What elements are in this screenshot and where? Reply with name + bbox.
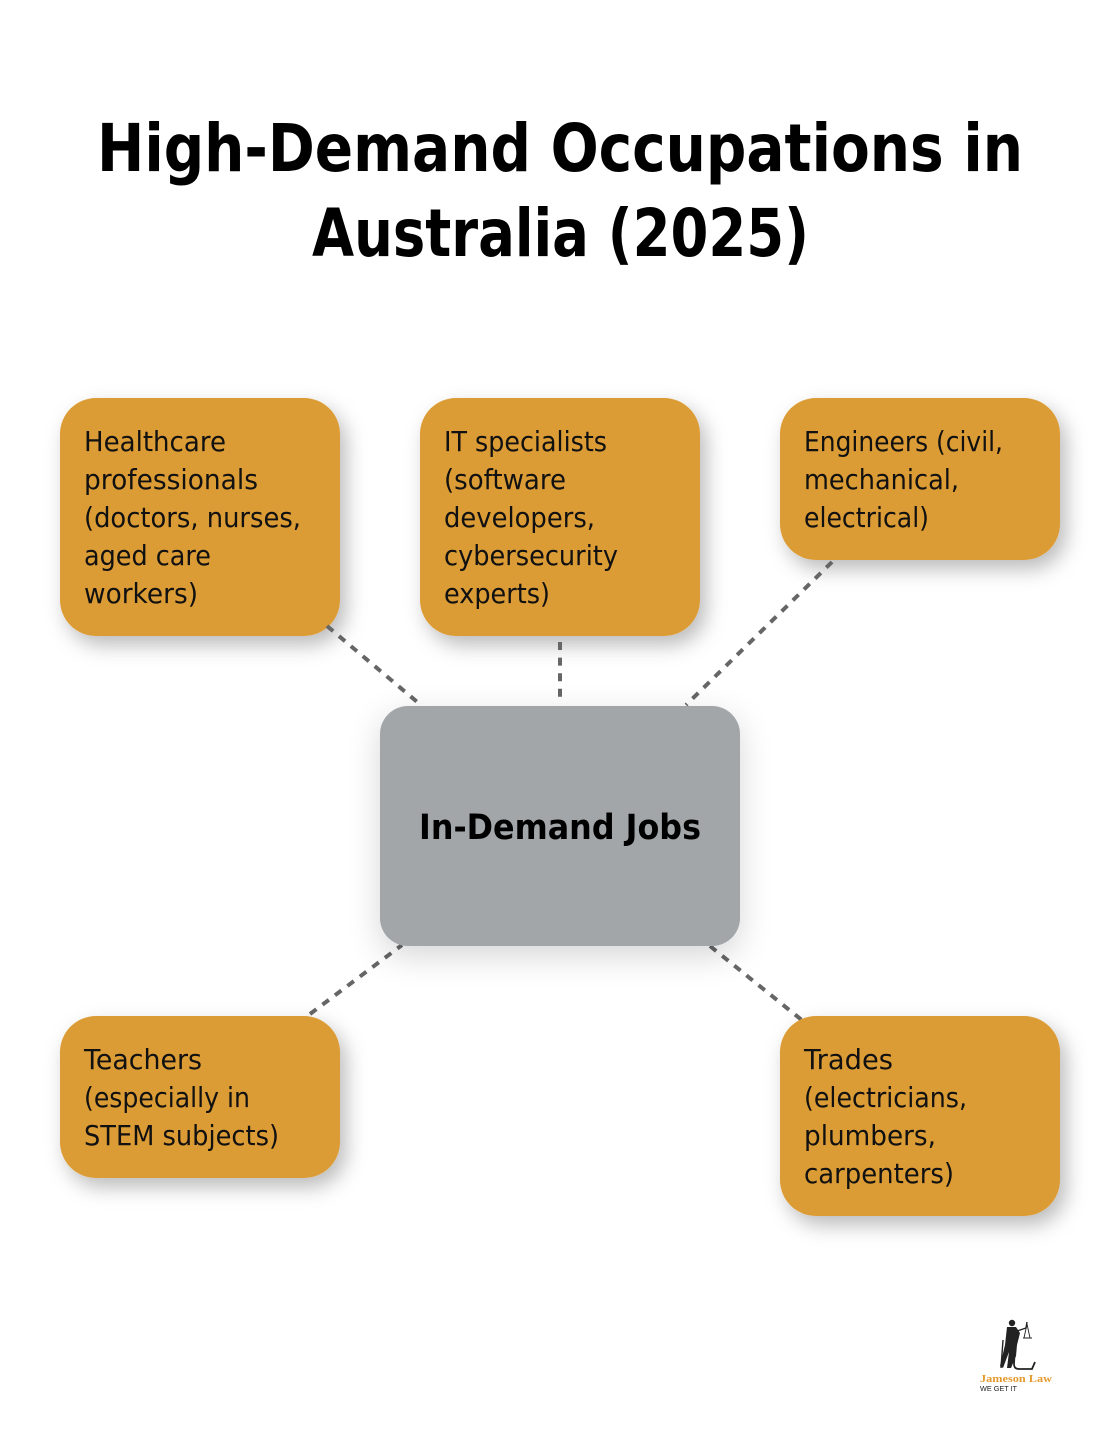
- card: IT specialists: (software: [444, 464, 566, 496]
- card: engineers: electrical): [804, 502, 929, 534]
- card: healthcare professionals: Healthcare: [84, 426, 226, 458]
- card: trades: Trades: [803, 1044, 893, 1076]
- card: teachers: [60, 1016, 340, 1178]
- connector: engineers to centre: [686, 562, 832, 705]
- connector: IT to centre: [558, 642, 562, 698]
- title: Australia (2025): [312, 196, 809, 272]
- title: [97, 111, 1023, 272]
- card: teachers: STEM subjects): [84, 1120, 279, 1152]
- icon: lady justice: [1000, 1320, 1035, 1369]
- logo wordmark: Jameson Law: [980, 1374, 1052, 1385]
- card: healthcare professionals: workers): [84, 578, 198, 610]
- logo tagline: WE GET IT: [980, 1386, 1018, 1393]
- card: IT specialists: [420, 398, 700, 636]
- centre box: in-demand jobs: [380, 706, 740, 946]
- logo: Jameson Law: [980, 1320, 1052, 1393]
- centre box: in-demand jobs: In-Demand Jobs: [419, 808, 701, 848]
- card: IT specialists: developers,: [444, 502, 595, 534]
- connector: trades to centre: [710, 946, 803, 1021]
- connector: teachers to centre: [310, 945, 402, 1014]
- card: engineers: [780, 398, 1060, 560]
- card: trades: (electricians,: [804, 1082, 967, 1114]
- card: IT specialists: cybersecurity: [444, 540, 618, 572]
- card: healthcare professionals: (doctors, nurses,: [84, 502, 301, 534]
- card: healthcare professionals: aged care: [84, 540, 211, 572]
- card: trades: carpenters): [804, 1158, 954, 1190]
- card: teachers: Teachers: [83, 1044, 202, 1076]
- card: IT specialists: experts): [444, 578, 550, 610]
- card: teachers: (especially in: [84, 1082, 250, 1114]
- card: IT specialists: IT specialists: [444, 426, 607, 458]
- card: healthcare professionals: professionals: [84, 464, 258, 496]
- card: trades: [780, 1016, 1060, 1216]
- card: engineers: mechanical,: [804, 464, 959, 496]
- card: engineers: Engineers (civil,: [804, 426, 1003, 458]
- card: trades: plumbers,: [804, 1120, 936, 1152]
- card: healthcare professionals: [60, 398, 340, 636]
- connector: healthcare to centre: [327, 626, 422, 706]
